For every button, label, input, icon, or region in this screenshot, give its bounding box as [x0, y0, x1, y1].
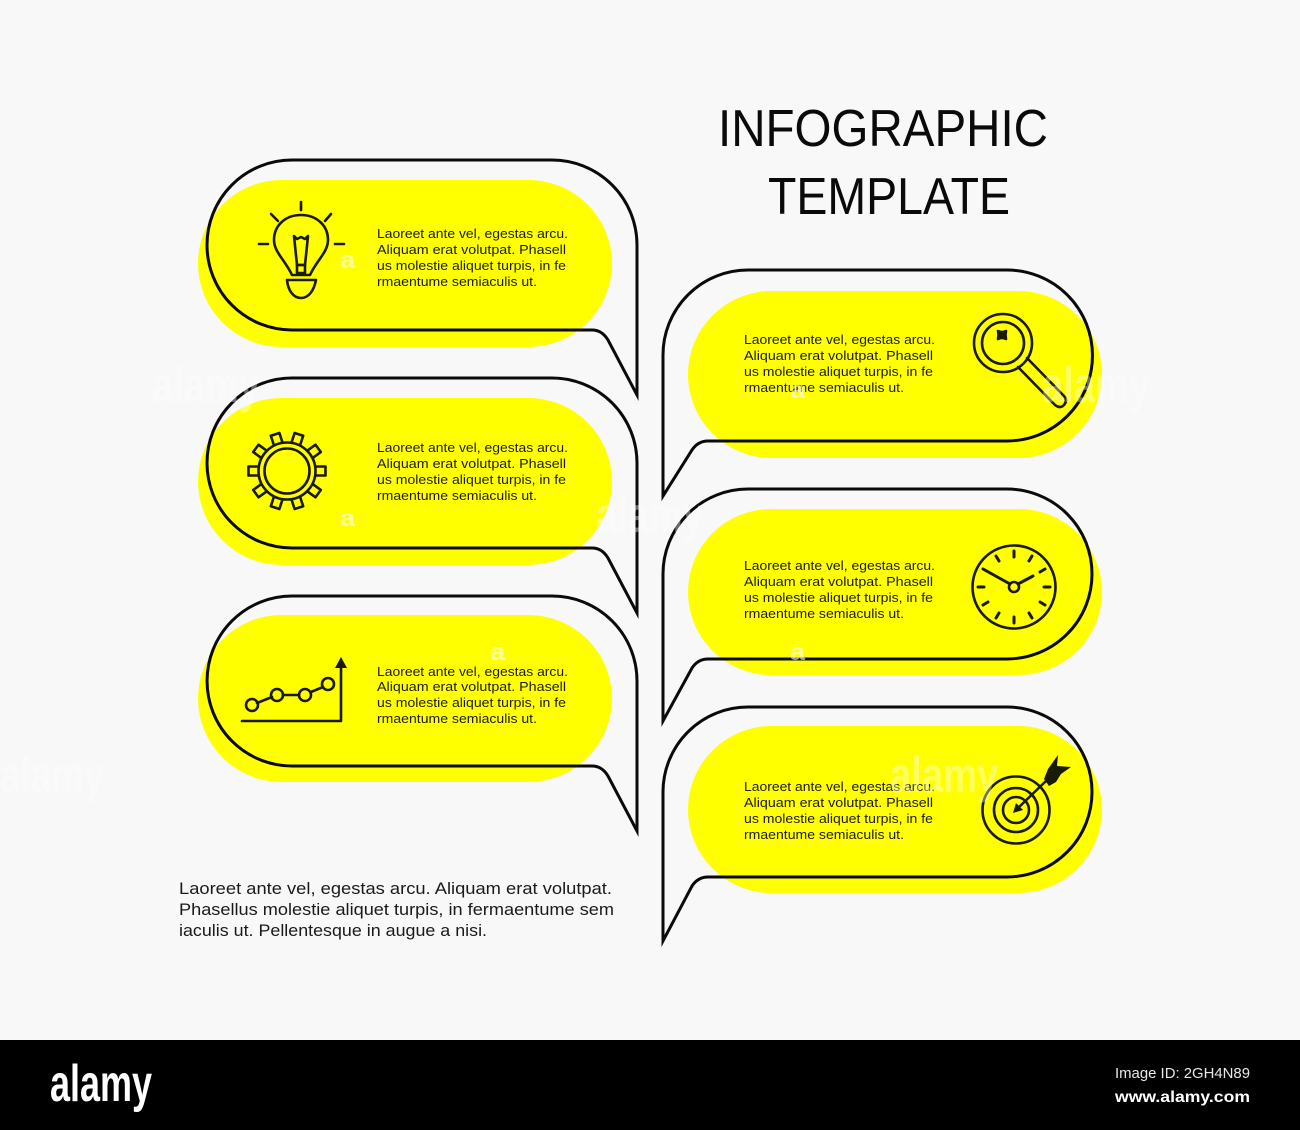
title — [718, 100, 1048, 226]
text block — [377, 440, 568, 503]
icon: magnifier — [974, 314, 1066, 407]
panel: left bubble 1, idea — [198, 160, 637, 395]
watermarks: a — [790, 639, 806, 666]
watermarks: a — [790, 377, 806, 404]
text block: us molestie aliquet turpis, in fe — [377, 695, 566, 710]
watermarks: alamy — [596, 487, 704, 543]
text block: Aliquam erat volutpat. Phasell — [377, 679, 566, 694]
footer url: www.alamy.com — [1114, 1089, 1250, 1106]
text block: bottom note: Phasellus molestie aliquet turpis, in fermaentume sem — [179, 900, 614, 919]
icon: gear — [248, 433, 326, 509]
text block: Laoreet ante vel, egestas arcu. — [377, 664, 568, 679]
text block: Laoreet ante vel, egestas arcu. — [744, 332, 935, 347]
text block — [377, 664, 568, 726]
text block: us molestie aliquet turpis, in fe — [377, 258, 566, 273]
panel: left bubble 3, growth — [198, 596, 637, 831]
panel: right bubble 2, time — [663, 489, 1102, 721]
panel: right bubble 1, search — [663, 270, 1102, 496]
footer bar — [0, 1040, 1300, 1130]
panel: left bubble 2, settings — [198, 378, 637, 613]
text block: rmaentume semiaculis ut. — [377, 711, 537, 726]
text block: Aliquam erat volutpat. Phasell — [744, 348, 933, 363]
watermarks: a — [490, 639, 506, 666]
text block: Aliquam erat volutpat. Phasell — [377, 242, 566, 257]
text block: bottom note: iaculis ut. Pellentesque in augue a nisi. — [179, 921, 487, 940]
text block: rmaentume semiaculis ut. — [377, 488, 537, 503]
text block: rmaentume semiaculis ut. — [744, 827, 904, 842]
text block: Laoreet ante vel, egestas arcu. — [744, 558, 935, 573]
text block — [744, 558, 935, 621]
text block: bottom note — [179, 879, 614, 940]
text block: bottom note: Laoreet ante vel, egestas arcu. Aliquam erat volutpat. — [179, 879, 612, 898]
text block — [377, 226, 568, 289]
text block: rmaentume semiaculis ut. — [744, 606, 904, 621]
text block: us molestie aliquet turpis, in fe — [744, 364, 933, 379]
title: TEMPLATE — [768, 168, 1010, 226]
icon: growth chart — [242, 657, 347, 721]
text block: Laoreet ante vel, egestas arcu. — [744, 779, 935, 794]
watermarks — [0, 247, 1150, 803]
text block: rmaentume semiaculis ut. — [744, 380, 904, 395]
watermarks: alamy — [1042, 357, 1150, 413]
icon: light bulb — [259, 202, 344, 298]
text block — [744, 779, 935, 842]
text block: us molestie aliquet turpis, in fe — [377, 472, 566, 487]
panel: right bubble 3, target — [663, 707, 1102, 941]
watermarks: alamy — [152, 357, 260, 413]
text block: us molestie aliquet turpis, in fe — [744, 590, 933, 605]
text block: Aliquam erat volutpat. Phasell — [744, 795, 933, 810]
text block: Aliquam erat volutpat. Phasell — [377, 456, 566, 471]
image id: Image ID: 2GH4N89 — [1115, 1065, 1250, 1082]
text block: rmaentume semiaculis ut. — [377, 274, 537, 289]
watermarks: alamy — [890, 747, 998, 803]
icon: clock — [972, 546, 1056, 628]
text block: Laoreet ante vel, egestas arcu. — [377, 440, 568, 455]
footer logo: alamy — [50, 1055, 152, 1113]
text block: us molestie aliquet turpis, in fe — [744, 811, 933, 826]
title: INFOGRAPHIC — [718, 100, 1048, 158]
text block — [744, 332, 935, 395]
watermarks: a — [340, 247, 356, 274]
icon: target with arrow — [982, 755, 1071, 844]
watermarks: a — [340, 505, 356, 532]
text block: Aliquam erat volutpat. Phasell — [744, 574, 933, 589]
text block: Laoreet ante vel, egestas arcu. — [377, 226, 568, 241]
watermarks: alamy — [0, 747, 104, 803]
